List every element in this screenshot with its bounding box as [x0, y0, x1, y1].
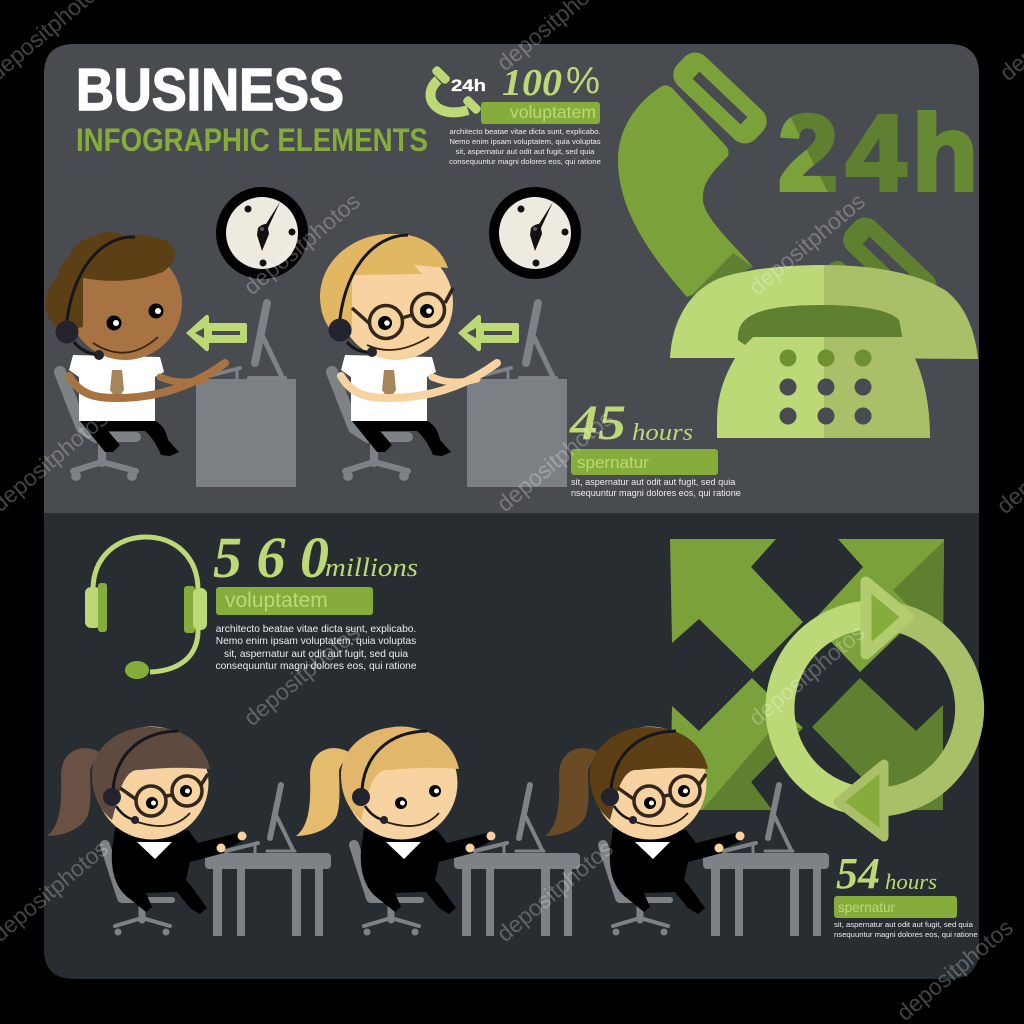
stat: 100% — [502, 60, 600, 104]
stat: 100%: % — [566, 60, 600, 102]
panel: top section — [44, 44, 979, 513]
watermarks: depositphotos — [239, 619, 365, 731]
big 24h label: h — [912, 92, 978, 213]
stat: 560 millions — [213, 525, 418, 590]
stat: 45 hours: 45 — [569, 394, 626, 450]
icon: big handset — [618, 46, 773, 297]
stat: 54 hours — [836, 849, 937, 898]
character: man with brown hair — [46, 232, 225, 456]
character: woman 2 blonde — [296, 726, 580, 936]
text block: top description: architecto beatae vitae dicta sunt, explicabo. — [449, 127, 601, 136]
icon: four-way arrows — [670, 539, 944, 810]
label bar: spernatur: spernatur — [577, 453, 649, 472]
text block: headset description: sit, aspernatur aut odit aut fugit, sed quia — [224, 649, 408, 660]
big 24h label: 4 — [846, 92, 906, 213]
text block: lower description: nsequuntur magni dolores eos, qui ratione — [834, 930, 978, 939]
desk and monitor 2 — [467, 303, 567, 487]
label bar: spernatur — [571, 449, 718, 475]
icon: small phone 24h — [430, 65, 486, 115]
big 24h label: 2 — [778, 92, 838, 213]
watermarks: depositphotos — [492, 405, 618, 517]
stat: 54 hours: 54 — [836, 849, 880, 898]
arrow 2 — [458, 315, 519, 351]
panel: bottom section — [44, 513, 979, 979]
label bar: spernatur lower: spernatur — [838, 900, 896, 915]
text block: spernatur description — [571, 477, 741, 498]
icon: headset — [85, 537, 207, 679]
text block: headset description: Nemo enim ipsam voluptatem, quia voluptas — [216, 636, 416, 647]
label bar: spernatur lower — [834, 896, 957, 918]
icon: telephone — [670, 265, 978, 438]
arrow 1 — [186, 315, 247, 351]
stat: 560 millions: millions — [325, 553, 418, 582]
icon: small phone 24h: 24h — [451, 76, 486, 95]
character: blonde man with glasses — [320, 234, 497, 456]
icon: rear handset piece — [825, 211, 943, 315]
chair 2 — [332, 372, 409, 481]
label bar: voluptatem large — [216, 587, 373, 615]
text block: top description — [449, 127, 601, 166]
watermarks: depositphotos — [492, 835, 618, 947]
text block: lower description: sit, aspernatur aut odit aut fugit, sed quia — [834, 920, 974, 929]
watermarks: depositphotos — [744, 188, 870, 300]
icon: refresh cycle — [780, 582, 970, 837]
chair 1 — [60, 372, 137, 481]
watermarks: depositphotos — [239, 188, 365, 300]
text block: top description: Nemo enim ipsam voluptatem, quia voluptas — [449, 137, 601, 146]
desk and monitor 1 — [196, 303, 296, 487]
text block: headset description — [215, 624, 417, 672]
text block: headset description: consequuntur magni dolores eos, qui ratione — [215, 661, 417, 672]
stat: 54 hours: hours — [885, 869, 937, 894]
stat: 100%: 100 — [502, 62, 562, 104]
label bar: voluptatem small: voluptatem — [510, 102, 596, 122]
stat: 45 hours: hours — [632, 420, 693, 446]
character: woman 1 with brown hair — [47, 726, 331, 936]
character: woman 3 with brown hair — [545, 726, 829, 936]
stat: 45 hours — [569, 394, 693, 450]
clock 1 — [216, 187, 308, 279]
label bar: voluptatem large: voluptatem — [225, 589, 328, 612]
title: INFOGRAPHIC ELEMENTS — [76, 122, 428, 158]
big 24h label — [778, 92, 978, 213]
title — [76, 57, 428, 158]
watermarks: depositphotos — [744, 619, 870, 731]
text block: spernatur description: sit, aspernatur aut odit aut fugit, sed quia — [571, 477, 736, 487]
clock 2 — [489, 187, 581, 279]
text block: headset description: architecto beatae vitae dicta sunt, explicabo. — [216, 624, 416, 635]
stat: 560 millions: 560 — [213, 525, 329, 590]
watermarks: depositphotos — [892, 914, 1018, 1024]
text block: spernatur description: nsequuntur magni dolores eos, qui ratione — [571, 488, 741, 498]
text block: lower description — [834, 920, 978, 939]
text block: top description: consequuntur magni dolores eos, qui ratione — [449, 157, 601, 166]
text block: top description: sit, aspernatur aut odit aut fugit, sed quia — [456, 147, 595, 156]
title: BUSINESS — [76, 57, 344, 123]
label bar: voluptatem small — [481, 102, 600, 124]
